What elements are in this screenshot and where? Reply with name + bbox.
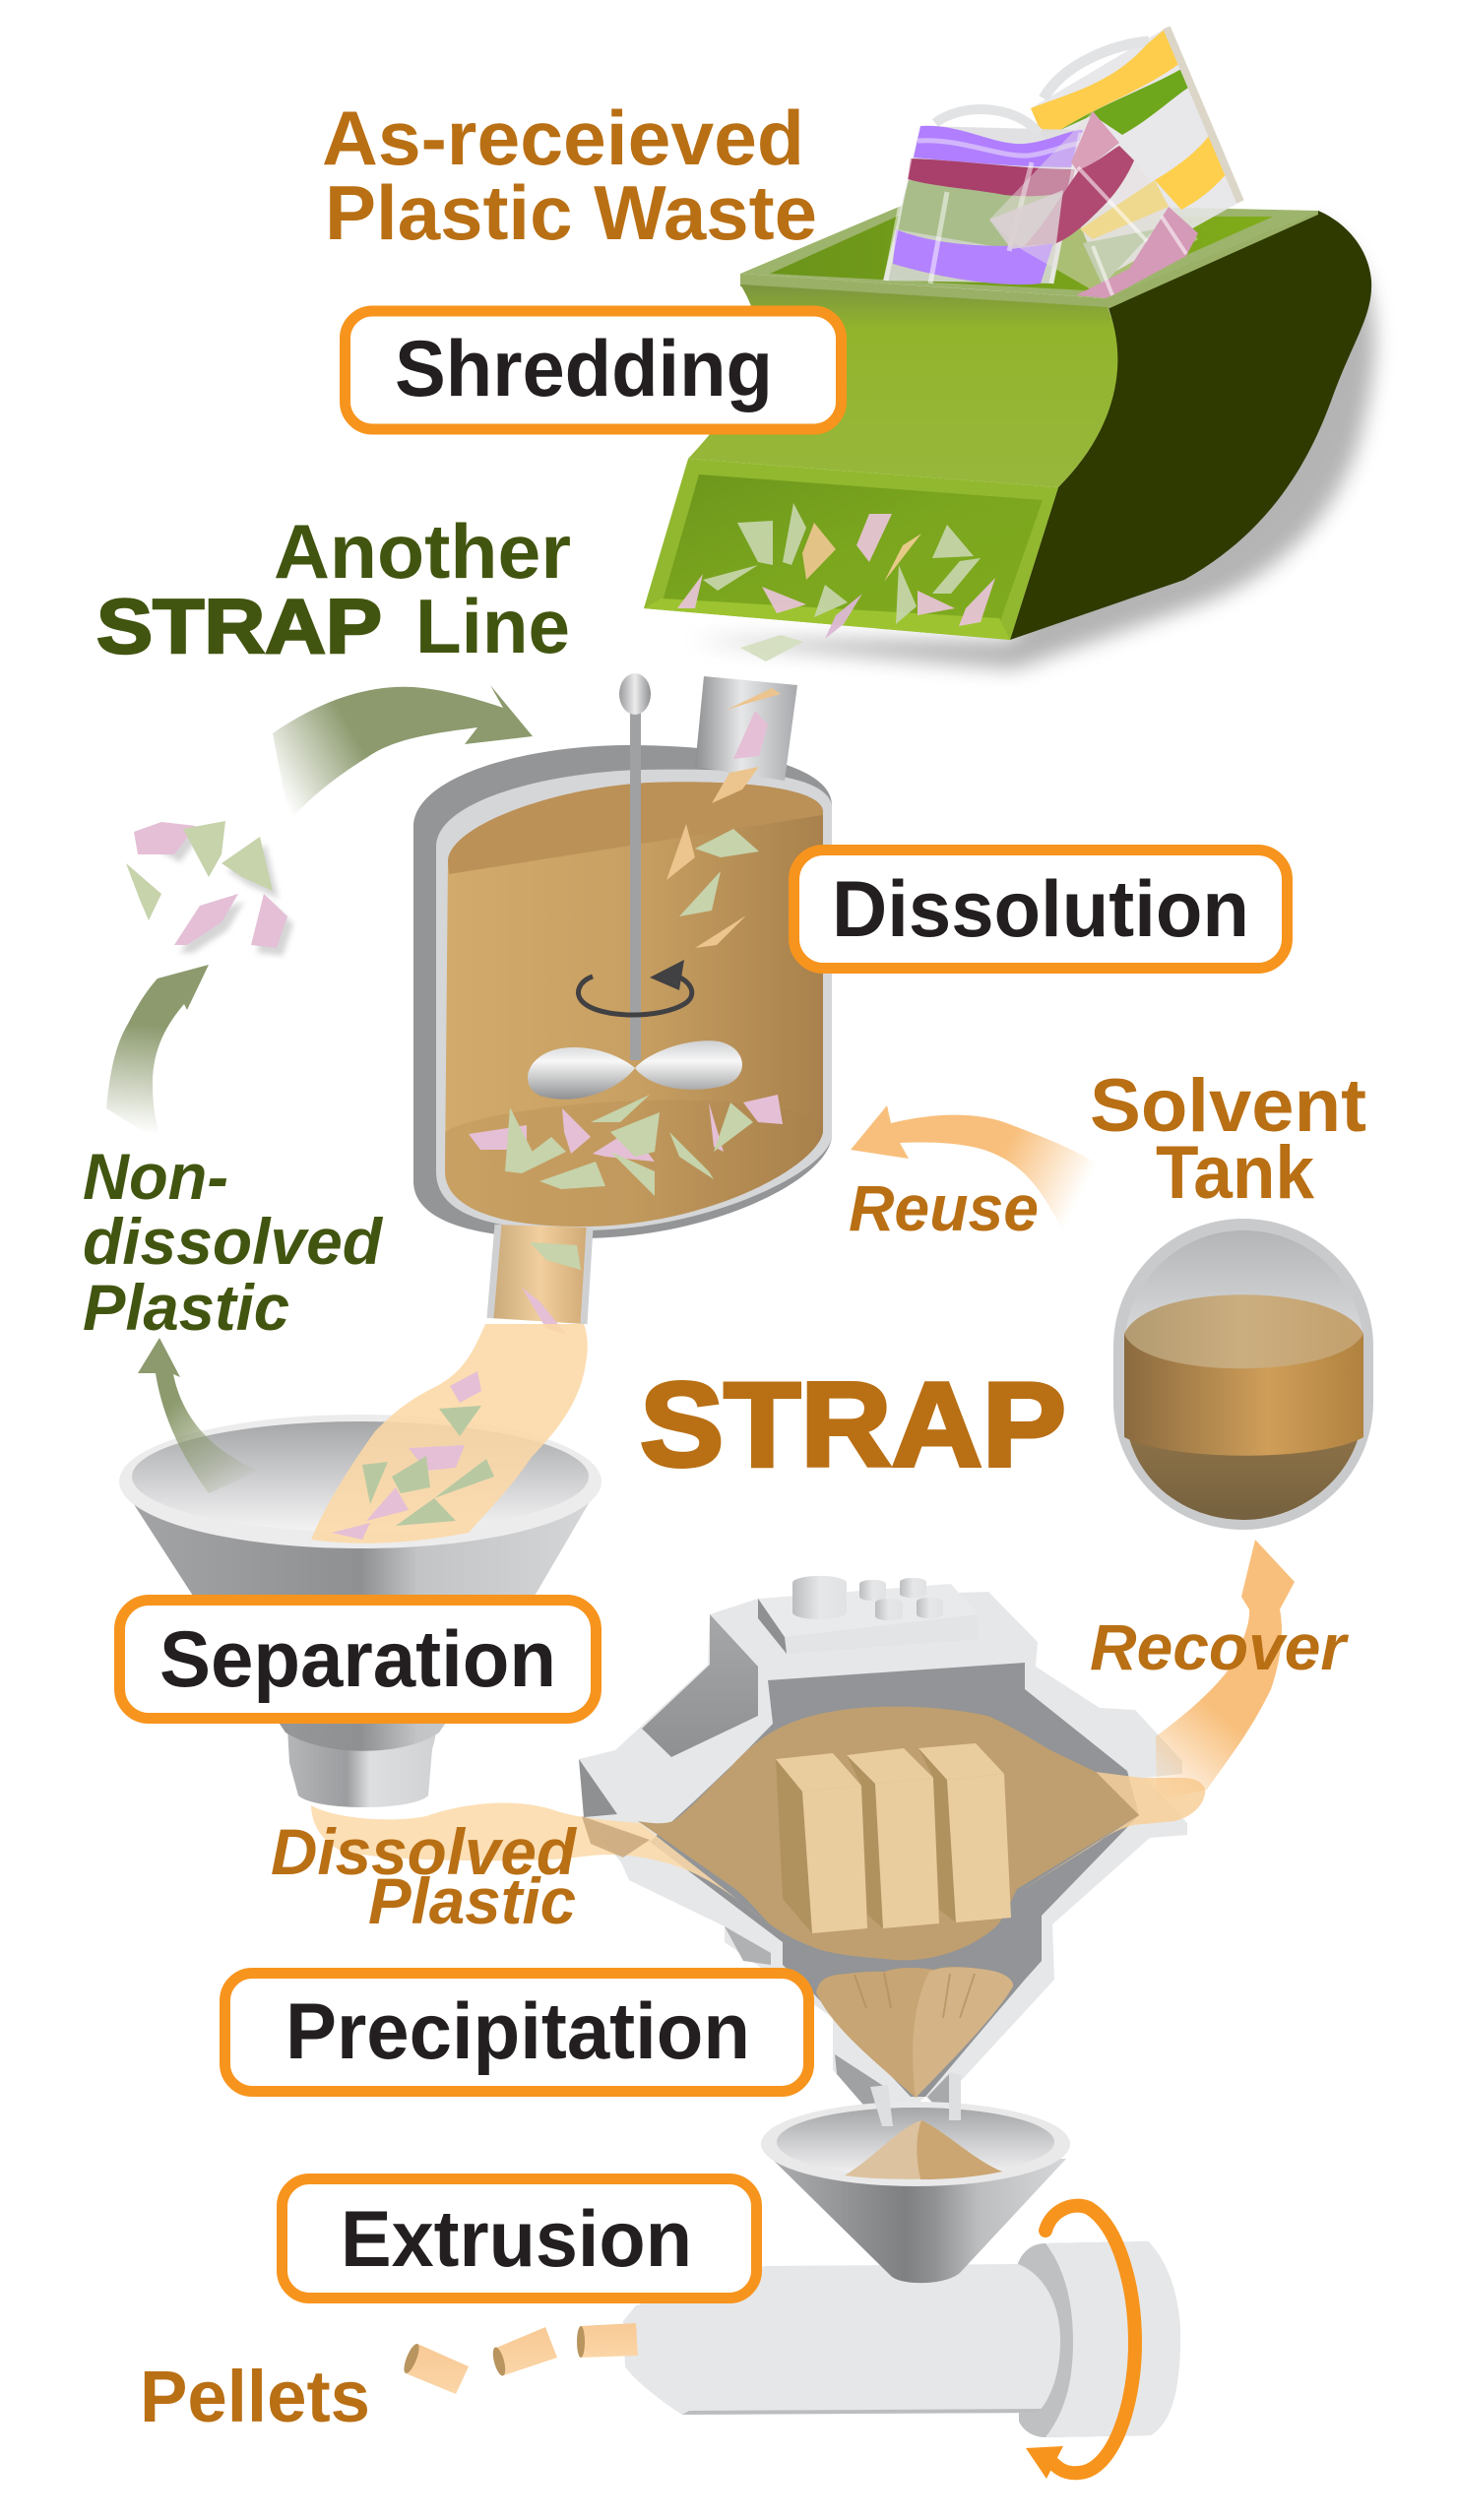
precipitate right mass bbox=[913, 1967, 1013, 2098]
funnel cone bbox=[119, 1481, 602, 1751]
flange face bbox=[1045, 2241, 1180, 2437]
shredder opening bbox=[770, 216, 1273, 291]
text: dissolved plastic bbox=[271, 1815, 578, 1937]
label: dissolution: Dissolution bbox=[832, 865, 1249, 954]
reactor liquid bbox=[445, 782, 823, 1227]
liquid bottom shading bbox=[445, 1101, 823, 1227]
outlet flakes bbox=[530, 1242, 581, 1270]
plastic bag: yellow and green bbox=[1031, 28, 1240, 279]
vessel body bbox=[579, 1592, 1187, 2126]
pink band lower bbox=[1076, 207, 1198, 298]
funnel interior bbox=[132, 1421, 589, 1532]
green band bbox=[1060, 69, 1191, 135]
extruder barrel bbox=[623, 2264, 1060, 2415]
label: precipitation: Precipitation bbox=[285, 1987, 750, 2076]
bag body bbox=[989, 111, 1198, 297]
label: extrusion bbox=[282, 2179, 756, 2298]
hopper interior bbox=[777, 2108, 1054, 2176]
funnel neck bbox=[285, 1693, 439, 1807]
text: non-dissolved plastic bbox=[83, 1140, 384, 1344]
heading: another strap line bbox=[96, 508, 571, 669]
green patch bbox=[1083, 229, 1155, 285]
plastic bag: purple and maroon bbox=[883, 109, 1083, 284]
pellets bbox=[401, 2323, 638, 2394]
left nozzle bbox=[835, 2054, 888, 2126]
pale see-through bbox=[1080, 180, 1169, 239]
pellet 2 bbox=[490, 2327, 557, 2377]
small cylinder 4 bbox=[917, 1598, 943, 1618]
precipitate left mass bbox=[816, 1967, 1013, 2098]
label: precipitation bbox=[224, 1973, 809, 2091]
label: extrusion: Extrusion bbox=[341, 2195, 692, 2284]
small cylinder 3 bbox=[875, 1599, 903, 1620]
pellet 1 bbox=[401, 2342, 469, 2394]
bag body bbox=[883, 126, 1083, 284]
reactor inner wall bbox=[436, 770, 832, 1230]
bag body bbox=[1031, 28, 1240, 279]
pile shade bbox=[917, 2120, 1002, 2179]
shredder output window bbox=[662, 474, 1043, 624]
pink band upper bbox=[1071, 111, 1119, 174]
right nozzle bbox=[927, 2074, 949, 2120]
reactor vessel: dissolution bbox=[413, 673, 832, 1334]
left wall shade bbox=[642, 1614, 758, 1757]
arrow: to another line bbox=[273, 685, 533, 821]
text: reuse: Reuse bbox=[849, 1171, 1039, 1244]
heading: another strap line: STRAP bbox=[96, 583, 382, 669]
arrow: non-dissolved up bbox=[138, 1338, 260, 1493]
text: dissolved plastic: Dissolved bbox=[271, 1815, 578, 1888]
loose non-dissolved plastic flakes bbox=[126, 821, 293, 956]
plastic bag: pink bbox=[989, 111, 1198, 298]
bag seam bbox=[1167, 28, 1240, 202]
large cylinder bbox=[792, 1576, 847, 1619]
nozzle over hopper bbox=[870, 2072, 961, 2126]
heading: solvent tank: Tank bbox=[1156, 1131, 1315, 1215]
flow right bbox=[1017, 1772, 1205, 1893]
purple band lower bbox=[893, 229, 1053, 284]
vessel cavity bbox=[650, 1663, 1139, 2097]
bag handle bbox=[1044, 41, 1149, 98]
tank dome interior bbox=[1124, 1230, 1363, 1520]
heading: another strap line: Line bbox=[415, 583, 570, 669]
text: non-dissolved plastic: dissolved bbox=[83, 1205, 384, 1278]
liquid back surface bbox=[448, 782, 823, 874]
yellow band lower bbox=[1155, 136, 1228, 210]
purple band highlight bbox=[918, 141, 1079, 156]
shredder dark side bbox=[1010, 211, 1371, 640]
yellow band top bbox=[1031, 28, 1181, 131]
funnel rim bbox=[119, 1415, 602, 1548]
flow through flange bbox=[582, 1816, 650, 1858]
shredder front face bbox=[688, 284, 1117, 487]
heading: as-received plastic waste: As-receieved bbox=[322, 94, 804, 181]
text: recover: Recover bbox=[1090, 1610, 1349, 1683]
heading: solvent tank bbox=[1090, 1064, 1366, 1215]
impeller bbox=[528, 1040, 742, 1100]
precipitate bbox=[816, 1967, 1013, 2098]
arrow: reuse solvent bbox=[851, 1105, 1112, 1238]
shredder shadow bbox=[689, 221, 1374, 669]
outlet tube bbox=[490, 1225, 590, 1324]
maroon band bbox=[1024, 146, 1134, 246]
hopper cone bbox=[772, 2159, 1066, 2283]
pellet 3 bbox=[577, 2323, 638, 2358]
small cylinder 1 bbox=[859, 1580, 886, 1601]
hopper rim bbox=[761, 2102, 1070, 2186]
arrow: up to loose plastic bbox=[106, 965, 209, 1143]
label: shredding: Shredding bbox=[395, 325, 773, 413]
rotation arrow orange bbox=[1026, 2206, 1135, 2479]
tank shell bbox=[1113, 1219, 1373, 1530]
precipitation vessel bbox=[311, 1576, 1205, 2126]
lower left wall bbox=[725, 1926, 771, 1965]
heading: as-received plastic waste: Plastic Waste bbox=[325, 169, 817, 256]
label: separation: Separation bbox=[159, 1615, 556, 1704]
shredder rim back bbox=[740, 202, 1318, 298]
powder pile bbox=[845, 2120, 1002, 2179]
heading: another strap line: Another bbox=[274, 508, 571, 595]
stirrer shaft bbox=[630, 711, 641, 1060]
text: non-dissolved plastic: Plastic bbox=[83, 1271, 289, 1344]
top block bbox=[758, 1576, 979, 1654]
green see-through bbox=[896, 180, 1066, 248]
arrow: recover solvent bbox=[1156, 1540, 1295, 1801]
label: dissolution bbox=[793, 850, 1288, 969]
purple band top bbox=[914, 126, 1083, 167]
bag streaks bbox=[1078, 167, 1186, 295]
text: dissolved plastic: Plastic bbox=[368, 1864, 576, 1937]
separator funnel bbox=[119, 1324, 602, 1807]
floating flakes bbox=[666, 688, 781, 948]
heading: solvent tank: Solvent bbox=[1090, 1064, 1366, 1148]
block 3 bbox=[919, 1748, 956, 1922]
filter blocks bbox=[776, 1743, 1011, 1933]
stirrer knob bbox=[619, 673, 651, 715]
block 1 bbox=[776, 1759, 812, 1933]
tank liquid band bbox=[1124, 1334, 1363, 1456]
translucent corner bbox=[989, 190, 1063, 249]
barrel bottom shadow bbox=[682, 2409, 1042, 2415]
tube edges bbox=[490, 1225, 590, 1324]
tank liquid surface bbox=[1124, 1294, 1363, 1368]
maroon band bbox=[908, 158, 1075, 196]
extruder bbox=[623, 2102, 1180, 2479]
settled flakes pile bbox=[469, 1095, 783, 1196]
label: separation bbox=[120, 1601, 597, 1719]
rotation arrow bbox=[578, 960, 692, 1015]
reactor outer shell bbox=[413, 745, 832, 1238]
label: shredding bbox=[345, 311, 841, 429]
shredded plastic in window bbox=[677, 503, 995, 662]
solution flow into funnel bbox=[311, 1324, 588, 1544]
block 2 bbox=[847, 1755, 883, 1928]
inlet tube bbox=[695, 676, 797, 781]
window lip bbox=[644, 598, 1010, 640]
tank liquid bottom bbox=[1124, 1334, 1363, 1520]
solvent tank bbox=[1113, 1219, 1373, 1530]
text: non-dissolved plastic: Non- bbox=[83, 1140, 228, 1213]
small cylinder 2 bbox=[900, 1578, 926, 1598]
heading: strap: STRAP bbox=[640, 1357, 1066, 1491]
heading: as-received plastic waste bbox=[322, 94, 817, 256]
shredder lower box bbox=[644, 459, 1058, 640]
flange ring bbox=[1018, 2241, 1180, 2437]
dissolved plastic flow left bbox=[311, 1803, 763, 1920]
left notch bbox=[579, 1759, 617, 1817]
solution blob bbox=[638, 1707, 1139, 1960]
bag handle bbox=[935, 109, 1039, 133]
flakes in funnel bbox=[332, 1371, 494, 1540]
shredder front rim bbox=[740, 211, 1318, 309]
shredder machine bbox=[644, 28, 1374, 669]
bag streaks bbox=[886, 128, 1081, 284]
text: pellets: Pellets bbox=[140, 2356, 370, 2437]
precipitate folds bbox=[855, 1973, 975, 2018]
